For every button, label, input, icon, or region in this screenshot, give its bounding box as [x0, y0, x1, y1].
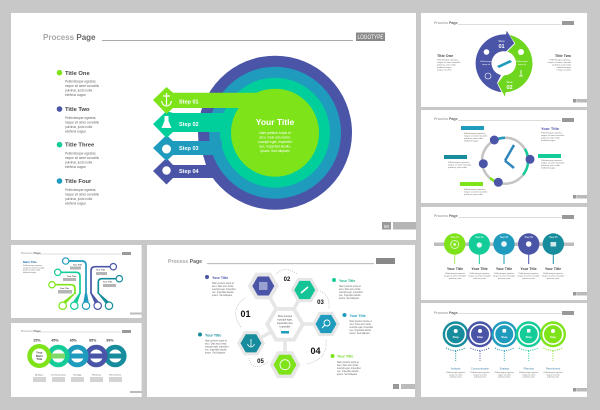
title one: neque sit amet convallis	[437, 61, 461, 64]
panel: five-step circles slide: Process Page	[434, 311, 458, 315]
main title: eleifend augue	[23, 272, 37, 274]
legend list: eleifend augue	[65, 165, 86, 169]
timeline descriptions: pulvinar justo	[498, 277, 511, 280]
concentric circles chart: ipsum. Sed aliquam	[261, 149, 290, 153]
timeline titles	[447, 267, 561, 271]
legend list: neque sit amet convallis	[65, 120, 99, 124]
timeline descriptions: neque sit amet convallis	[517, 274, 540, 278]
ring labels: Recruitment	[109, 374, 122, 376]
branch labels: Your Title	[60, 287, 70, 290]
dotted arrows	[236, 270, 329, 367]
step descriptions: Pellentesque egestas	[495, 371, 514, 374]
percent labels: 45%	[51, 338, 59, 342]
timeline descriptions: pulvinar justo	[522, 277, 535, 280]
timeline descriptions: Pellentesque egestas	[543, 272, 563, 275]
legend list: Title Two	[65, 107, 90, 113]
your title: neque sit amet convallis	[541, 134, 565, 137]
timeline descriptions: pulvinar justo	[473, 277, 486, 280]
cycle diagram: neque sit	[518, 63, 526, 66]
hex text blocks: ipsum. Sed aliquam	[339, 298, 359, 300]
legend list: Pellentesque egestas,	[65, 80, 96, 84]
timeline descriptions: pulvinar justo	[449, 277, 462, 280]
step numbers: 02	[284, 277, 291, 283]
timeline titles: Your Title	[471, 267, 488, 271]
concentric circles chart: nec, imperdiet iaculis,	[259, 144, 291, 148]
timeline descriptions: Pellentesque egestas	[445, 272, 465, 275]
labels: neque sit amet convallis	[464, 190, 488, 194]
step 04 arrow: Step 04	[179, 169, 200, 175]
hex text blocks: arcu. Duis arcu tortor,	[205, 342, 227, 346]
step descriptions: neque sit amet	[449, 373, 463, 376]
step descriptions: neque sit amet	[522, 373, 536, 376]
hex text blocks: Nam pretium turpis et	[205, 340, 227, 342]
ring labels: Strategy	[73, 374, 82, 376]
ring labels: Communication	[51, 374, 67, 376]
ring captions	[33, 377, 122, 382]
timeline line	[434, 242, 574, 246]
linked rings: Title	[36, 357, 43, 361]
labels: neque sit amet convallis	[541, 162, 565, 164]
linked rings: Your	[36, 350, 43, 354]
hex text blocks: Nam pretium turpis et	[339, 285, 361, 288]
step circles: Step	[477, 335, 483, 339]
step descriptions: pulvinar justo	[474, 376, 487, 379]
legend list: eleifend augue	[65, 129, 86, 133]
labels: neque sit amet convallis	[464, 134, 488, 138]
timeline descriptions: Pellentesque egestas	[470, 272, 489, 275]
title two: Title Two	[555, 54, 572, 58]
step descriptions: pulvinar justo	[498, 376, 511, 379]
panel: main concentric circles slide	[11, 13, 416, 240]
title one: pulvinar, justo nulla	[437, 64, 456, 66]
step descriptions: Pellentesque egestas	[543, 371, 563, 374]
step circles: Step	[550, 335, 556, 339]
step descriptions: pulvinar justo	[547, 376, 560, 379]
branch captions	[58, 266, 116, 294]
ring labels	[35, 374, 122, 376]
hex text blocks: suscipit eget, imperdiet	[212, 288, 236, 291]
step descriptions: neque sit amet	[473, 373, 487, 376]
timeline circles: Step 03	[500, 236, 509, 239]
cycle diagram: 02	[506, 85, 513, 91]
branch nodes	[49, 258, 123, 309]
legend list: pulvinar, justo nulla	[65, 160, 92, 164]
ring labels: Planning	[92, 374, 101, 376]
main title: neque sit amet convallis	[23, 266, 44, 269]
hex text blocks: Nam pretium turpis et	[350, 320, 372, 323]
step labels: Analysis	[451, 366, 461, 370]
cycle diagram: Pellentesque	[480, 60, 493, 63]
title two	[548, 54, 572, 72]
step circles	[443, 321, 566, 347]
step labels: Communication	[471, 366, 490, 370]
hex text blocks: suscipit eget, imperdiet	[350, 326, 373, 329]
legend list: eleifend augue	[65, 201, 86, 205]
branch labels	[60, 264, 113, 290]
legend list: Title Four	[65, 179, 92, 185]
panel: clock ring slide	[421, 110, 587, 203]
concentric circles chart: arcu. Duis arcu tortor,	[259, 136, 291, 140]
step labels: Planning	[524, 366, 534, 370]
panel: cycle arrows slide	[421, 13, 587, 107]
hex text blocks: ipsum. Sed aliquam	[337, 374, 357, 376]
hex text blocks: ipsum. Sed aliquam	[205, 352, 225, 354]
title two: pulvinar, justo nulla	[552, 64, 572, 66]
labels: pulvinar, justo nulla	[448, 166, 467, 169]
your title: Pellentesque egestas,	[541, 132, 563, 134]
hex text blocks: nec, imperdiet iaculis,	[339, 294, 361, 297]
legend list: neque sit amet convallis	[65, 156, 99, 160]
logotype	[356, 32, 385, 41]
title two: neque sit amet convallis	[548, 61, 572, 64]
page number tab	[382, 222, 416, 230]
step 03 arrow	[153, 135, 222, 161]
legend list: pulvinar, justo nulla	[65, 88, 92, 92]
labels: pulvinar, justo nulla	[464, 137, 483, 140]
branch labels: Your Title	[96, 268, 106, 272]
hex text blocks: suscipit eget, imperdiet	[337, 367, 361, 370]
title one	[437, 54, 461, 72]
cycle diagram: Step	[506, 80, 513, 84]
timeline circles: Step 04	[525, 236, 533, 239]
percent labels	[33, 338, 114, 342]
page tab	[393, 384, 415, 389]
labels: eleifend augue	[541, 168, 556, 170]
dotted connectors	[446, 348, 562, 361]
your title: Your Title	[541, 126, 560, 131]
panel: linked rings slide: Process Page	[21, 329, 41, 333]
labels: Pellentesque egestas,	[448, 161, 470, 164]
step numbers: 05	[257, 359, 264, 365]
center hexagon: imperdiet nec,	[277, 321, 293, 325]
timeline descriptions: Pellentesque egestas	[494, 272, 514, 275]
step labels	[451, 366, 560, 370]
timeline titles: Your Title	[496, 267, 512, 271]
center hexagon: Duis tempus	[278, 314, 293, 318]
step labels: Recruitment	[546, 366, 560, 370]
heading: Process Page	[168, 259, 202, 265]
labels	[444, 126, 565, 196]
cycle diagram: neque sit	[482, 63, 490, 66]
legend list: pulvinar, justo nulla	[65, 197, 92, 201]
labels: pulvinar, justo nulla	[464, 193, 483, 196]
step circles: Step	[526, 335, 532, 339]
percent labels: 65%	[70, 338, 78, 342]
title two: neque sit amet	[557, 68, 571, 72]
legend list: Pellentesque egestas,	[65, 116, 96, 120]
legend list: Title One	[65, 71, 90, 77]
step numbers: 04	[310, 346, 321, 356]
your title	[541, 126, 565, 142]
step descriptions: Pellentesque egestas	[519, 371, 538, 374]
hex text blocks: suscipit eget, imperdiet	[205, 346, 229, 348]
panel: branching lines slide	[11, 245, 142, 318]
timeline descriptions: neque sit amet convallis	[542, 274, 564, 278]
concentric circles chart: suscipit eget, imperdiet	[258, 140, 292, 144]
step numbers	[240, 277, 324, 365]
timeline stems	[455, 254, 553, 264]
main title: Pellentesque egestas,	[23, 264, 43, 267]
linked rings	[27, 344, 127, 368]
branch lines	[55, 261, 116, 294]
labels: pulvinar, justo nulla	[541, 164, 560, 167]
panel: five-step circles slide	[421, 303, 587, 397]
labels: Pellentesque egestas,	[541, 159, 563, 162]
legend list: pulvinar, justo nulla	[65, 125, 92, 129]
heading: Process Page	[434, 21, 458, 25]
timeline descriptions: neque sit amet convallis	[468, 274, 491, 278]
step descriptions: neque sit amet	[498, 373, 511, 376]
hex text blocks: arcu. Duis arcu tortor,	[350, 323, 372, 326]
title two: Pellentesque egestas,	[549, 58, 571, 62]
hex text blocks: nec, imperdiet iaculis,	[205, 348, 227, 352]
satellite hexagons	[237, 273, 340, 378]
step circles: Step	[501, 335, 508, 339]
hex text blocks: Your Title	[339, 279, 355, 283]
timeline descriptions: pulvinar justo	[547, 277, 560, 280]
main title: pulvinar, justo nulla	[23, 269, 41, 272]
timeline descriptions: neque sit amet convallis	[493, 274, 515, 278]
hex text blocks: Your Title	[205, 334, 221, 338]
labels: neque sit amet convallis	[448, 164, 472, 166]
cycle diagram: Pellentesque	[516, 60, 529, 63]
hex text blocks: ipsum. Sed aliquam	[350, 333, 370, 335]
legend list: Pellentesque egestas,	[65, 188, 96, 192]
page number tab: 50	[384, 224, 389, 229]
labels: Pellentesque egestas,	[464, 188, 486, 191]
legend list: Pellentesque egestas,	[65, 152, 96, 156]
timeline circles: Step 01	[451, 236, 459, 239]
percent labels: 99%	[106, 338, 114, 342]
hex text blocks: nec, imperdiet iaculis,	[350, 329, 372, 332]
timeline titles: Your Title	[520, 267, 537, 271]
cycle diagram	[476, 31, 532, 97]
center hexagon: suscipit eget,	[277, 318, 293, 322]
step circles: Step	[453, 335, 459, 339]
step descriptions: Pellentesque egestas	[470, 371, 490, 374]
timeline circles	[444, 233, 564, 255]
hex text blocks: Your Title	[212, 276, 228, 280]
hex connectors	[251, 286, 326, 365]
hex text blocks: Your Title	[350, 314, 366, 318]
hex text blocks: Nam pretium turpis et	[212, 282, 234, 285]
main title: Main Title	[23, 260, 37, 264]
main title	[23, 260, 44, 274]
step labels: Strategy	[499, 366, 510, 370]
center hexagon: imperdiet	[280, 324, 291, 328]
logotype	[376, 258, 395, 264]
timeline circles: Step 02	[475, 236, 484, 239]
team icon	[497, 60, 512, 68]
hex text blocks: nec, imperdiet iaculis,	[337, 370, 359, 373]
percent labels: 85%	[89, 338, 97, 342]
legend list: neque sit amet convallis	[65, 192, 99, 196]
title one: Title One	[437, 54, 453, 58]
hex text blocks: ipsum. Sed aliquam	[212, 295, 232, 297]
legend list: neque sit amet convallis	[65, 84, 99, 88]
branch labels: Your Title	[67, 275, 77, 278]
clock ring	[482, 138, 528, 184]
linked rings: Main	[36, 354, 43, 358]
hex text blocks: Nam pretium turpis et	[337, 361, 359, 364]
title one: Pellentesque egestas,	[437, 58, 459, 62]
step 02 arrow	[153, 111, 240, 138]
ring labels: Analysis	[35, 374, 44, 376]
your title: eleifend augue	[541, 140, 556, 142]
step numbers: 01	[240, 309, 251, 319]
hex text blocks: suscipit eget, imperdiet	[339, 291, 363, 294]
center title: Your Title	[256, 117, 294, 127]
labels: eleifend augue	[464, 140, 479, 142]
labels: Pellentesque egestas,	[464, 132, 486, 135]
cycle diagram: Step	[498, 39, 505, 43]
panel: linked rings slide	[11, 323, 142, 397]
timeline descriptions	[444, 272, 564, 280]
cycle diagram: 01	[498, 44, 505, 50]
hex text blocks: Your Title	[337, 354, 353, 358]
branch labels: Your Title	[73, 264, 83, 266]
step numbers: 03	[317, 300, 324, 306]
timeline titles: Your Title	[545, 267, 561, 271]
ring icons	[479, 136, 534, 187]
heading: process page: Process Page	[43, 33, 96, 42]
title two: eleifend augue	[557, 67, 572, 69]
panel: branching lines slide: Process Page	[21, 251, 41, 255]
timeline titles: Your Title	[447, 267, 463, 271]
panel: five-step timeline slide	[421, 207, 587, 300]
step descriptions: pulvinar justo	[523, 376, 535, 379]
white gaps between step arrows	[172, 108, 206, 165]
panel: five-step timeline slide: Process Page	[434, 214, 458, 218]
step 01 arrow	[153, 87, 258, 114]
step descriptions: pulvinar justo	[450, 376, 462, 379]
step 01 arrow: Step 01	[179, 100, 199, 106]
your title: pulvinar, justo nulla	[541, 136, 560, 140]
branch wedges	[60, 293, 112, 304]
branch labels: Your Title	[103, 280, 113, 284]
timeline descriptions: neque sit amet convallis	[444, 274, 466, 278]
legend list: Title Three	[65, 142, 95, 148]
logotype: LOGOTYPE	[358, 35, 384, 41]
hex text blocks: nec, imperdiet iaculis,	[212, 291, 234, 294]
concentric circles chart	[153, 56, 352, 210]
concentric circles chart: Nam pretium turpis et	[259, 131, 291, 135]
step 03 arrow: Step 03	[179, 146, 199, 152]
step descriptions	[446, 371, 563, 379]
hex text blocks: arcu. Duis arcu tortor,	[339, 288, 361, 291]
hex text blocks: arcu. Duis arcu tortor,	[337, 364, 359, 367]
title one: eleifend augue	[437, 67, 452, 69]
step 04 arrow	[153, 158, 215, 184]
percent labels: 25%	[33, 338, 41, 342]
title one: neque sit amet	[437, 68, 452, 72]
panel: clock ring slide: Process Page	[434, 117, 458, 121]
timeline descriptions: Pellentesque egestas	[519, 272, 538, 275]
step 02 arrow: Step 02	[179, 122, 199, 128]
timeline circles: Step 05	[549, 236, 558, 239]
step descriptions: Pellentesque egestas	[446, 371, 465, 374]
hex text blocks	[198, 275, 373, 376]
legend list: eleifend augue	[65, 93, 86, 97]
panel: hexagon process slide	[147, 245, 415, 397]
center hexagon	[265, 307, 305, 342]
legend list	[57, 70, 99, 205]
step descriptions: neque sit amet	[546, 373, 560, 376]
hex text blocks: arcu. Duis arcu tortor,	[212, 285, 234, 288]
